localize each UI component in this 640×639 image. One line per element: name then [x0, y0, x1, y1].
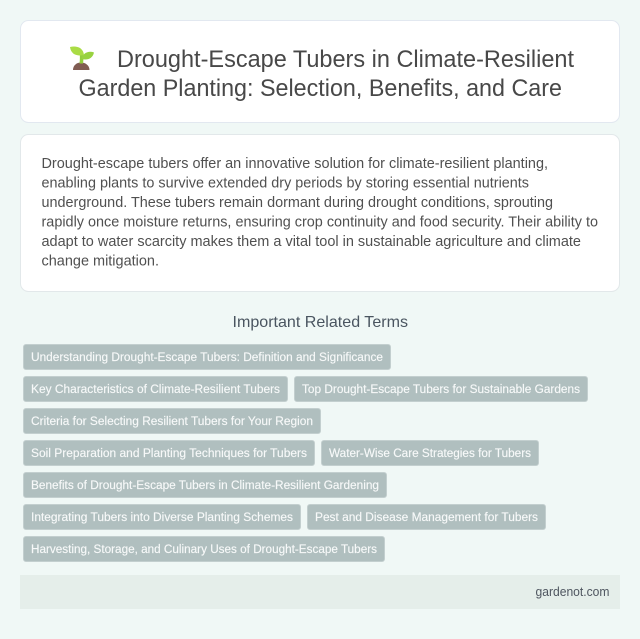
title: Garden Planting: Selection, Benefits, and Care: [78, 75, 562, 102]
panel: description card: [20, 134, 620, 292]
tag: pest and disease: Pest and Disease Management for Tubers: [315, 510, 538, 524]
tag: integrating: [24, 504, 300, 530]
title: [78, 46, 574, 102]
icon: seedling: [70, 46, 94, 70]
tag: selection criteria: [24, 408, 320, 434]
description text: underground. These tubers remain dormant during drought conditions, sprouting: [42, 195, 553, 211]
tag: harvesting: Harvesting, Storage, and Culinary Uses of Drought-Escape Tubers: [31, 542, 377, 556]
tag: water-wise care: Water-Wise Care Strategies for Tubers: [329, 446, 531, 460]
title: Drought-Escape Tubers in Climate-Resilient: [117, 46, 574, 73]
footer bar: [20, 575, 620, 609]
heading: important related terms: Important Related Terms: [232, 314, 408, 331]
tag: top tubers: Top Drought-Escape Tubers for Sustainable Gardens: [302, 382, 580, 396]
description text: adapt to water scarcity makes them a vital tool in sustainable agriculture and climate: [42, 234, 581, 250]
tag: key characteristics: [24, 376, 288, 402]
tag: selection criteria: Criteria for Selecting Resilient Tubers for Your Region: [31, 414, 313, 428]
footer bar: gardenot.com: [536, 585, 610, 599]
tag: understanding: [24, 344, 390, 370]
description text: rapidly once moisture returns, ensuring crop continuity and food security. Their ability to: [42, 214, 598, 230]
tag: understanding: Understanding Drought-Escape Tubers: Definition and Significance: [31, 350, 383, 364]
tag: water-wise care: [322, 440, 538, 466]
panel: title card: [20, 20, 620, 122]
tag: integrating: Integrating Tubers into Diverse Planting Schemes: [31, 510, 293, 524]
tag: top tubers: [294, 376, 588, 402]
tag: soil preparation: Soil Preparation and Planting Techniques for Tubers: [31, 446, 307, 460]
description text: change mitigation.: [42, 254, 159, 270]
tag list: [24, 344, 588, 562]
tag: pest and disease: [308, 504, 546, 530]
tag: key characteristics: Key Characteristics of Climate-Resilient Tubers: [31, 382, 280, 396]
tag: harvesting: [24, 536, 384, 562]
tag: benefits: [24, 472, 386, 498]
description text: Drought-escape tubers offer an innovative solution for climate-resilient planting,: [42, 156, 548, 172]
description text: enabling plants to survive extended dry periods by storing essential nutrients: [42, 176, 529, 192]
tag: soil preparation: [24, 440, 314, 466]
description text: [42, 156, 598, 270]
tag: benefits: Benefits of Drought-Escape Tubers in Climate-Resilient Gardening: [31, 478, 379, 492]
